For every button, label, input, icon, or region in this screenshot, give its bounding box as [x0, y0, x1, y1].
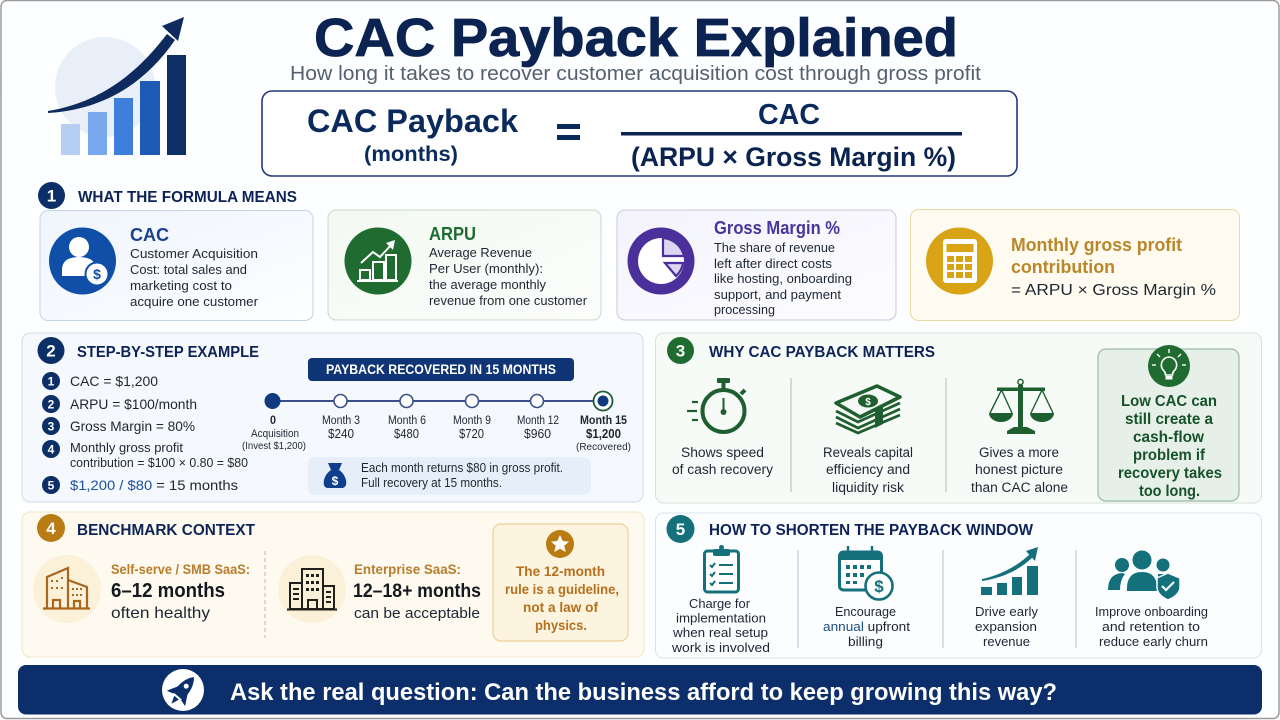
icon: team with shield	[1108, 550, 1180, 600]
panel: CAC card: Cost: total sales and	[130, 262, 247, 277]
self-serve benchmark: often healthy	[111, 605, 210, 622]
benefit labels: Gives a more	[979, 445, 1059, 460]
timeline: $1,200	[586, 426, 621, 441]
callout: low CAC warning: recovery takes	[1118, 465, 1222, 482]
section 2 heading: STEP-BY-STEP EXAMPLE	[77, 344, 259, 361]
tactic labels: annual upfront	[823, 619, 910, 634]
icon: customer with dollar: $	[93, 266, 101, 282]
panel: CAC card: Customer Acquisition	[130, 246, 258, 261]
steps list: 1	[48, 374, 55, 388]
self-serve benchmark: Self-serve / SMB SaaS:	[111, 562, 250, 577]
benefit labels: Reveals capital	[823, 445, 913, 460]
benefit labels: of cash recovery	[672, 462, 773, 477]
icon: money stack	[836, 386, 900, 433]
panel: ARPU card: ARPU	[429, 224, 476, 244]
timeline: $720	[459, 426, 484, 441]
section 1 heading	[38, 182, 297, 209]
icon: customer with dollar	[49, 228, 116, 294]
benefit labels: than CAC alone	[971, 480, 1068, 495]
benefit labels: liquidity risk	[832, 480, 904, 495]
timeline: $480	[394, 426, 419, 441]
timeline: 0	[270, 413, 276, 427]
tactic labels: Drive early	[975, 604, 1039, 619]
panel: CAC card: CAC	[130, 225, 169, 245]
steps list: ARPU = $100/month	[70, 396, 197, 412]
payback banner: PAYBACK RECOVERED IN 15 MONTHS	[326, 362, 556, 377]
self-serve benchmark: 6–12 months	[111, 580, 225, 602]
panel: ARPU card: Per User (monthly):	[429, 261, 543, 276]
steps list: contribution = $100 × 0.80 = $80	[70, 455, 248, 470]
section 1 heading: WHAT THE FORMULA MEANS	[78, 189, 297, 206]
section 2 heading: 2	[46, 342, 56, 360]
callout: 12-month rule	[493, 524, 628, 641]
timeline	[242, 392, 631, 453]
steps list: 3	[48, 420, 55, 434]
icon: calendar with dollar: $	[874, 577, 884, 596]
payback banner	[308, 358, 574, 381]
enterprise benchmark: Enterprise SaaS:	[354, 562, 461, 577]
tactic labels: Encourage	[835, 604, 896, 619]
benefit labels: honest picture	[975, 462, 1063, 477]
section 2 heading	[38, 337, 259, 364]
callout: 12-month rule: The 12-month	[516, 563, 605, 579]
callout: 12-month rule: not a law of	[523, 599, 598, 615]
callout: monthly return: Each month returns $80 in gross profit.	[361, 461, 563, 475]
icon: balance scale	[989, 379, 1054, 434]
callout: monthly return: Full recovery at 15 months.	[361, 476, 502, 490]
timeline: Month 15	[580, 415, 628, 427]
icon: small office building	[33, 555, 101, 623]
callout: low CAC warning: Low CAC can	[1121, 393, 1217, 410]
icon: expansion revenue chart	[981, 547, 1038, 595]
benefit labels: Shows speed	[681, 445, 764, 460]
tactic labels: when real setup	[672, 625, 768, 640]
subtitle: How long it takes to recover customer acquisition cost through gross profit	[290, 63, 981, 85]
title: CAC Payback Explained	[314, 8, 958, 68]
steps list: Gross Margin = 80%	[70, 418, 195, 434]
panel: why CAC payback matters	[656, 333, 1262, 503]
timeline: Month 6	[388, 415, 426, 427]
panel: ARPU card: the average monthly	[429, 277, 546, 292]
callout: 12-month rule: physics.	[535, 617, 587, 633]
panel: Gross Margin card: left after direct costs	[714, 256, 832, 271]
icon: clipboard checklist	[704, 545, 738, 592]
enterprise benchmark: 12–18+ months	[353, 581, 481, 602]
icon: enterprise building	[278, 555, 346, 623]
panel: benchmark context	[22, 512, 644, 657]
footer banner: Ask the real question: Can the business afford to keep growing this way?	[230, 679, 1057, 706]
tactic labels: revenue	[983, 634, 1030, 649]
panel: step-by-step example	[22, 333, 643, 502]
icon: growth chart with arrow	[48, 17, 186, 155]
callout: low CAC warning: still create a	[1125, 411, 1213, 428]
icon: stopwatch	[687, 378, 745, 432]
enterprise benchmark: can be acceptable	[354, 605, 480, 622]
steps list: 5	[48, 478, 55, 492]
section 4 heading: 4	[46, 519, 56, 538]
icon: rocket	[162, 669, 204, 712]
callout: 12-month rule: rule is a guideline,	[505, 581, 619, 597]
icon: light bulb	[1148, 345, 1190, 387]
tactic labels: reduce early churn	[1099, 634, 1208, 649]
icon: money stack: $	[865, 397, 871, 408]
timeline: Month 9	[453, 415, 491, 427]
timeline: Month 3	[322, 415, 360, 427]
timeline: Acquisition	[251, 428, 299, 440]
panel: ARPU card: Average Revenue	[429, 245, 532, 260]
formula box: CAC Payback	[307, 103, 518, 139]
panel: ARPU card: revenue from one customer	[429, 293, 588, 308]
panel: ARPU card	[328, 210, 601, 320]
panel: Monthly gross profit contribution card: Monthly gross profit	[1011, 234, 1182, 255]
footer banner	[18, 665, 1262, 714]
timeline: $240	[328, 426, 354, 441]
benefit labels: efficiency and	[826, 462, 910, 477]
panel: Gross Margin card: Gross Margin %	[714, 218, 840, 238]
panel: Monthly gross profit contribution card: contribution	[1011, 256, 1115, 277]
icon: calendar with dollar	[839, 546, 892, 600]
self-serve benchmark	[111, 562, 250, 622]
benefit labels	[672, 445, 1068, 495]
panel: CAC card: marketing cost to	[130, 278, 232, 293]
timeline: (Recovered)	[576, 441, 631, 453]
tactic labels: Charge for	[689, 596, 751, 611]
steps list	[42, 372, 248, 494]
section 5 heading	[666, 515, 1034, 543]
panel: Gross Margin card: support, and payment	[714, 287, 841, 302]
tactic labels: work is involved	[671, 640, 770, 655]
tactic labels: implementation	[676, 610, 766, 626]
formula box: CAC	[758, 99, 820, 131]
callout: low CAC warning: too long.	[1139, 483, 1200, 500]
panel: Gross Margin card: The share of revenue	[714, 240, 835, 255]
panel: how to shorten the payback window	[656, 513, 1262, 658]
icon: money bag: $	[332, 474, 339, 488]
section 1 heading: 1	[47, 186, 56, 206]
timeline: Month 12	[517, 415, 559, 427]
timeline: (Invest $1,200)	[242, 440, 306, 452]
section 3 heading	[667, 337, 935, 364]
panel: Gross Margin card: processing	[714, 302, 775, 317]
tactic labels: and retention to	[1102, 619, 1200, 634]
panel: Gross Margin card: like hosting, onboarding	[714, 271, 852, 286]
section 3 heading: WHY CAC PAYBACK MATTERS	[709, 344, 935, 361]
steps list: $1,200 / $80 = 15 months	[70, 477, 238, 493]
tactic labels: Improve onboarding	[1095, 604, 1208, 619]
panel: Gross Margin card	[617, 210, 896, 320]
section 3 heading: 3	[676, 342, 685, 360]
callout: low CAC warning: problem if	[1133, 447, 1206, 464]
icon: calculator	[926, 228, 993, 294]
tactic labels	[671, 596, 1208, 655]
icon: star badge	[546, 530, 574, 558]
steps list: 2	[48, 398, 55, 412]
icon: pie chart	[628, 228, 694, 294]
section 4 heading: BENCHMARK CONTEXT	[77, 522, 255, 539]
enterprise benchmark	[353, 562, 481, 622]
panel: Monthly gross profit contribution card: = ARPU × Gross Margin %	[1011, 282, 1216, 299]
callout: low CAC warning	[1098, 345, 1239, 501]
callout: low CAC warning: cash-flow	[1133, 429, 1205, 446]
steps list: 4	[48, 442, 55, 456]
steps list: CAC = $1,200	[70, 373, 158, 389]
section 5 heading: 5	[676, 520, 685, 539]
tactic labels: billing	[848, 634, 883, 649]
panel: CAC card	[40, 210, 313, 320]
section 4 heading	[37, 514, 255, 542]
formula box	[262, 91, 1017, 176]
panel: Monthly gross profit contribution card	[910, 210, 1240, 320]
panel: CAC card: acquire one customer	[130, 294, 259, 309]
section 5 heading: HOW TO SHORTEN THE PAYBACK WINDOW	[709, 522, 1034, 539]
tactic labels: expansion	[975, 619, 1037, 634]
callout: monthly return	[308, 457, 591, 495]
formula box: (months)	[364, 143, 458, 166]
formula box: (ARPU × Gross Margin %)	[631, 142, 956, 172]
steps list: Monthly gross profit	[70, 440, 183, 455]
icon: revenue chart	[344, 228, 412, 294]
icon: money bag	[324, 463, 346, 488]
timeline: $960	[524, 426, 551, 441]
